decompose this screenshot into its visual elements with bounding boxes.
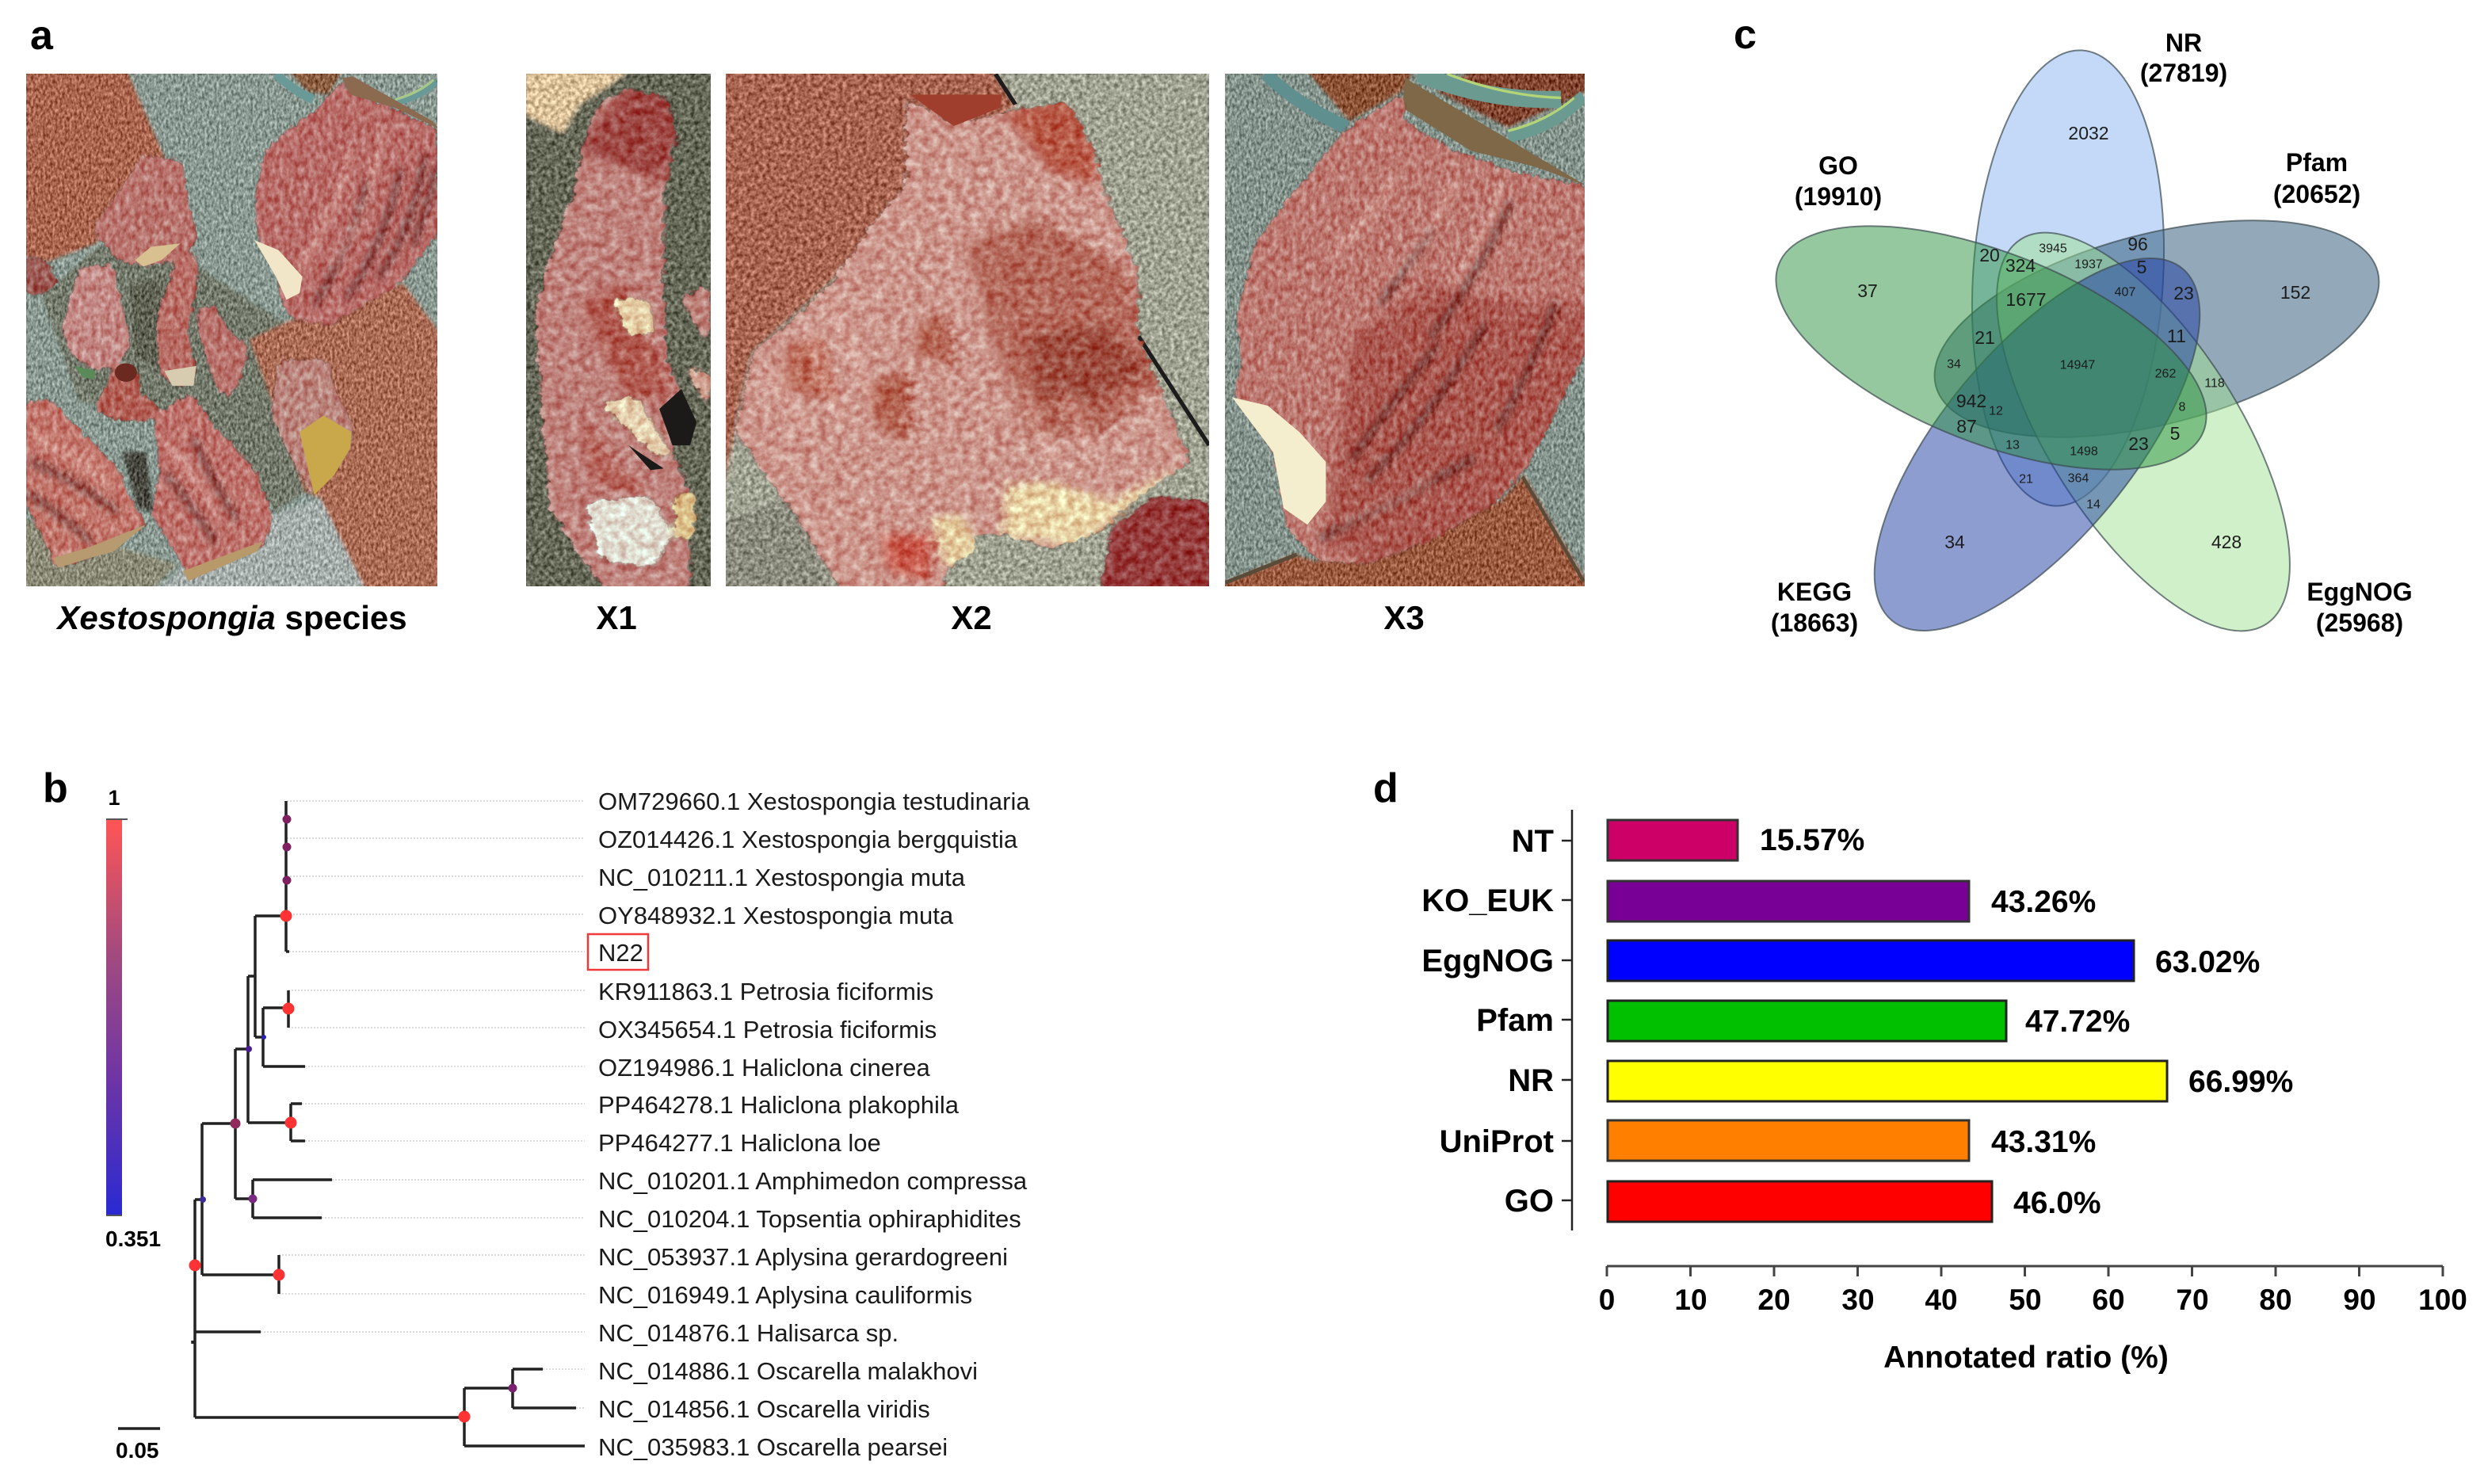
bar: Pfam (1476, 1001, 2130, 1041)
bar: UniProt (1440, 1120, 2096, 1161)
tree tip labels: NC_016949.1 Aplysina cauliformis (598, 1281, 972, 1309)
caption: X3: X3 (1383, 599, 1425, 636)
bar: UniProt: 43.31% (1991, 1125, 2096, 1159)
intersection counts: 14947 (2060, 358, 2095, 372)
tree tip labels: OZ194986.1 Haliclona cinerea (598, 1054, 931, 1082)
intersection counts: 942 (1956, 391, 1986, 411)
intersection counts: 5 (2170, 423, 2180, 444)
ellipse: KEGG (1818, 208, 2256, 681)
photo: specimen X3 (1225, 74, 1585, 586)
bar: EggNOG: EggNOG (1421, 944, 1554, 979)
tree tip labels: PP464277.1 Haliclona loe (598, 1129, 881, 1157)
tree tip labels: NC_010211.1 Xestospongia muta (598, 864, 966, 891)
photo: Xestospongia species group (26, 74, 437, 586)
x axis: 20 (1757, 1284, 1791, 1316)
panel a: Xestospongia photos (24, 71, 1589, 636)
set labels: (25968) (2316, 608, 2403, 637)
intersection counts: 152 (2280, 282, 2310, 303)
intersection counts: 12 (1989, 404, 2003, 418)
bar: GO: 46.0% (2013, 1186, 2101, 1220)
set labels: (27819) (2140, 59, 2227, 87)
panel c: five-set Venn diagram (1744, 29, 2413, 681)
bar: NT (1512, 820, 1864, 860)
y axis with ticks (1562, 810, 1572, 1230)
x axis: 30 (1841, 1284, 1875, 1316)
bar: UniProt: UniProt (1440, 1124, 1554, 1159)
photo: specimen X2 (726, 74, 1209, 586)
x axis: 60 (2092, 1284, 2125, 1316)
legend: bootstrap colour bar: 0.351 (105, 1226, 161, 1251)
x axis (1599, 1266, 2467, 1316)
intersection counts: 23 (2128, 433, 2149, 454)
intersection counts: 37 (1857, 280, 1878, 301)
intersection counts: 2032 (2068, 123, 2109, 143)
bar: Pfam: 47.72% (2025, 1005, 2130, 1039)
tree tip labels: NC_014886.1 Oscarella malakhovi (598, 1357, 978, 1385)
ellipse: GO (1744, 176, 2238, 520)
panel letter c: c (1734, 12, 1757, 58)
ellipse: Pfam (1912, 180, 2402, 478)
tree tip labels: OM729660.1 Xestospongia testudinaria (598, 788, 1030, 815)
intersection counts: 21 (1975, 327, 1995, 348)
intersection counts: 1937 (2074, 258, 2103, 271)
x axis: 80 (2259, 1284, 2292, 1316)
panel d: annotated ratio bar chart (1421, 810, 2467, 1375)
x axis: 0 (1599, 1284, 1615, 1316)
legend: bootstrap colour bar (105, 786, 161, 1251)
set labels: (19910) (1795, 182, 1882, 211)
caption: Xestospongia species: Xestospongia species (55, 599, 407, 636)
intersection counts: 5 (2137, 257, 2146, 277)
scale bar 0.05: 0.05 (116, 1438, 158, 1463)
x axis: 70 (2176, 1284, 2209, 1316)
intersection counts: 13 (2005, 439, 2020, 452)
bar: KO_EUK (1421, 881, 2096, 921)
intersection counts: 20 (1979, 245, 2000, 265)
intersection counts: 87 (1956, 416, 1977, 437)
intersection counts: 1677 (2005, 289, 2047, 310)
bar: NR: NR (1508, 1063, 1554, 1098)
intersection counts: 3945 (2039, 242, 2067, 255)
intersection counts: 364 (2068, 472, 2089, 485)
set labels: Pfam (2286, 148, 2348, 177)
bar: NT: 15.57% (1760, 823, 1864, 857)
bar: EggNOG: 63.02% (2155, 945, 2260, 979)
set labels (1771, 29, 2413, 637)
x axis: 100 (2418, 1284, 2467, 1316)
intersection counts: 428 (2211, 532, 2242, 552)
tree tip labels: NC_010204.1 Topsentia ophiraphidites (598, 1205, 1021, 1233)
set labels: GO (1818, 151, 1858, 180)
tree tip labels: N22 (598, 939, 643, 967)
intersection counts: 407 (2115, 285, 2135, 299)
legend: bootstrap colour bar: 1 (108, 786, 120, 810)
x axis title: Annotated ratio (%) (1883, 1341, 2169, 1375)
intersection counts: 96 (2127, 234, 2148, 254)
caption: X1: X1 (596, 599, 637, 636)
intersection counts (1857, 123, 2310, 552)
intersection counts: 8 (2179, 401, 2186, 414)
intersection counts: 23 (2173, 283, 2194, 303)
x axis: 50 (2009, 1284, 2042, 1316)
tree tip labels: KR911863.1 Petrosia ficiformis (598, 978, 933, 1005)
set labels: (20652) (2273, 180, 2360, 208)
tree tip labels: NC_053937.1 Aplysina gerardogreeni (598, 1243, 1008, 1271)
tree branches (193, 801, 585, 1446)
intersection counts: 34 (1944, 532, 1965, 552)
panel letter b: b (43, 765, 68, 811)
ellipse: NR (1959, 44, 2177, 512)
bar: NT: NT (1512, 824, 1554, 859)
intersection counts: 34 (1947, 358, 1961, 371)
tree tip labels: PP464278.1 Haliclona plakophila (598, 1091, 960, 1119)
tree tip labels: OY848932.1 Xestospongia muta (598, 902, 954, 929)
photo: specimen X1 (526, 74, 711, 586)
set labels: NR (2165, 29, 2202, 57)
bar: NR (1508, 1061, 2293, 1101)
tree tip labels: NC_014876.1 Halisarca sp. (598, 1319, 899, 1347)
intersection counts: 324 (2005, 255, 2036, 276)
x axis: 90 (2343, 1284, 2376, 1316)
bar: EggNOG (1421, 940, 2260, 981)
tree nodes (189, 814, 517, 1423)
bar: Pfam: Pfam (1476, 1003, 1554, 1038)
highlight box: N22 (588, 934, 648, 970)
intersection counts: 262 (2155, 368, 2176, 380)
intersection counts: 11 (2167, 326, 2186, 346)
tree tip labels (598, 788, 1030, 1461)
tree tip labels: NC_010201.1 Amphimedon compressa (598, 1167, 1028, 1195)
bar: KO_EUK: KO_EUK (1421, 883, 1554, 918)
set labels: EggNOG (2307, 578, 2413, 606)
panel letter a: a (30, 13, 54, 59)
bar: KO_EUK: 43.26% (1991, 885, 2096, 919)
intersection counts: 21 (2019, 472, 2033, 486)
bar: GO (1505, 1181, 2101, 1222)
tree tip labels: NC_035983.1 Oscarella pearsei (598, 1433, 948, 1461)
tree tip labels: OZ014426.1 Xestospongia bergquistia (598, 826, 1018, 853)
set labels: KEGG (1777, 578, 1852, 606)
bar: GO: GO (1505, 1184, 1554, 1219)
intersection counts: 14 (2086, 498, 2101, 512)
caption: X2: X2 (951, 599, 992, 636)
x axis: 10 (1674, 1284, 1708, 1316)
bar: NR: 66.99% (2188, 1065, 2293, 1099)
tree tip labels: OX345654.1 Petrosia ficiformis (598, 1016, 937, 1043)
ellipse: EggNOG (1940, 189, 2346, 675)
panel letter d: d (1373, 765, 1398, 811)
intersection counts: 118 (2204, 377, 2225, 390)
set labels: (18663) (1771, 608, 1858, 637)
dotted leader lines (261, 801, 585, 1408)
intersection counts: 1498 (2070, 445, 2098, 458)
x axis: 40 (1925, 1284, 1958, 1316)
tree tip labels: NC_014856.1 Oscarella viridis (598, 1395, 930, 1423)
panel b: phylogenetic tree (105, 786, 1030, 1463)
